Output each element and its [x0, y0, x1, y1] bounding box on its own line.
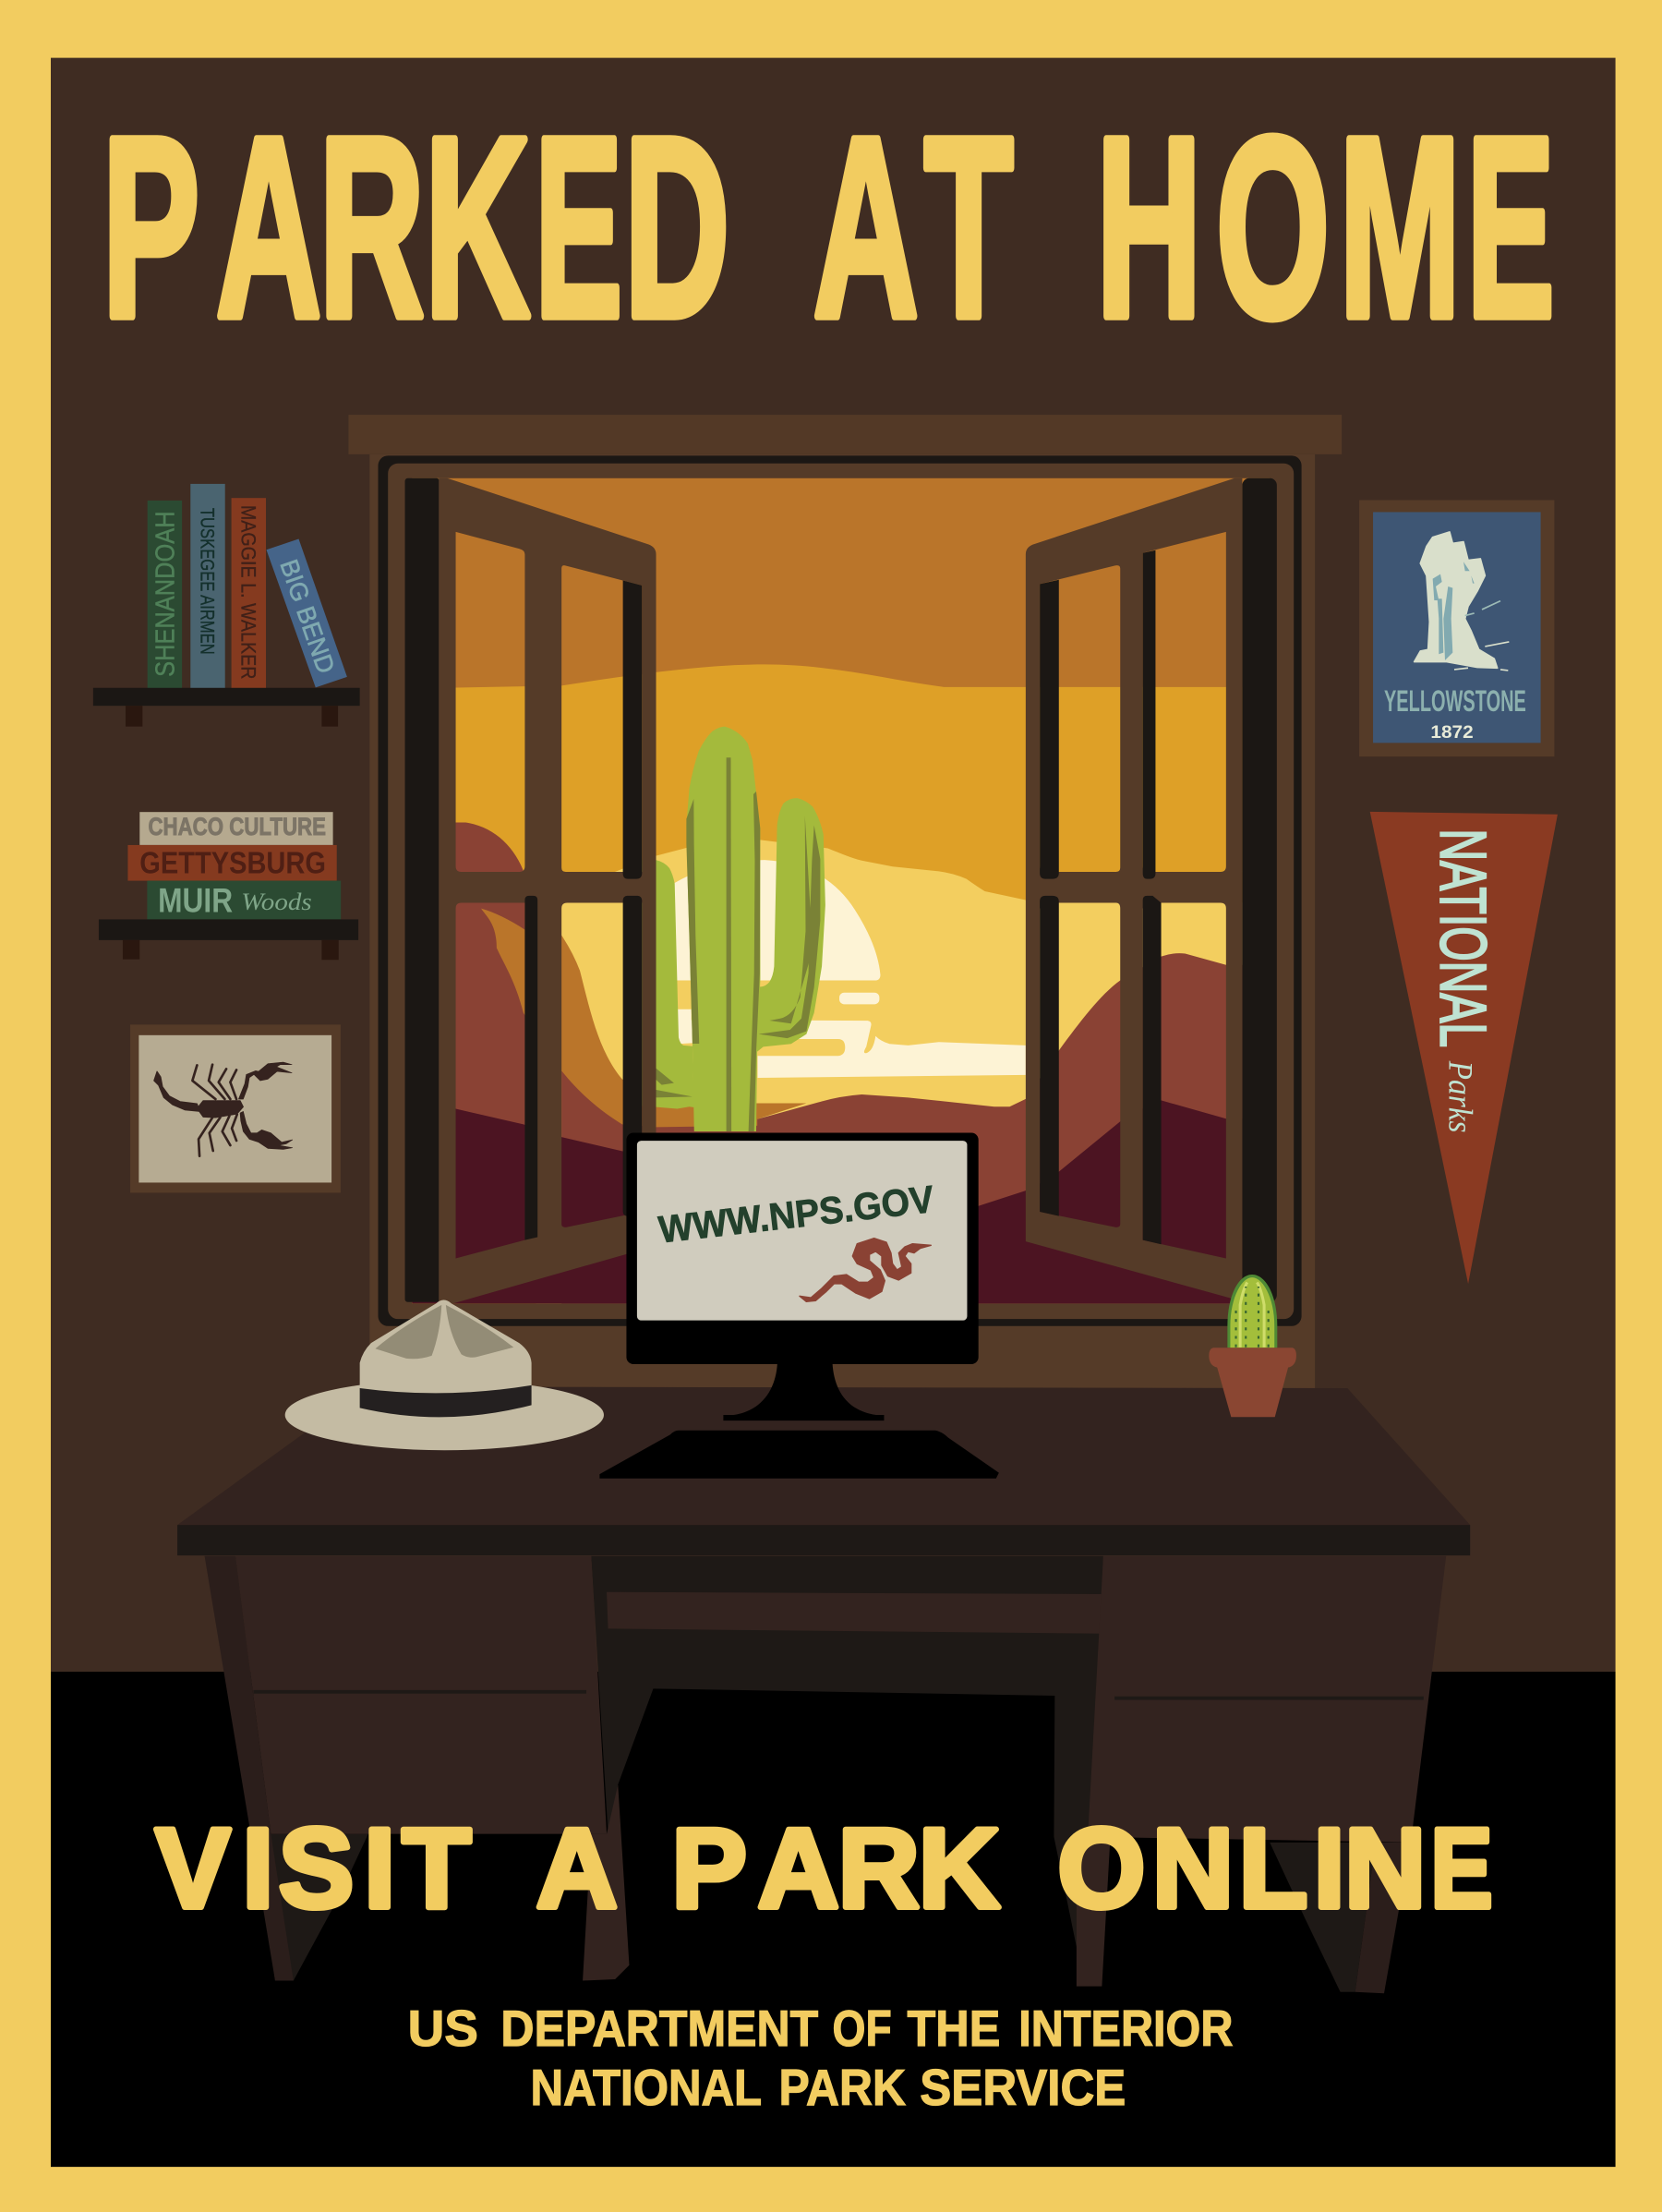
desk center recess: [591, 1556, 1103, 1947]
book: Shenandoah: SHENANDOAH: [151, 511, 180, 677]
setting sun and reflections: [656, 860, 1026, 1078]
agency name: [408, 2000, 1233, 2116]
National Parks pennant: [1370, 812, 1558, 1284]
brackets: [123, 940, 339, 960]
left pedestal inner leg: [583, 1784, 629, 1981]
window scene: desert sunset: [412, 478, 1270, 1303]
cactus shading: [656, 757, 820, 1131]
agency name: PARK: [778, 2059, 906, 2116]
title: E: [1467, 83, 1555, 370]
book: Big Bend: [266, 538, 347, 687]
sky: [412, 478, 1270, 1303]
headline: visit a park online: VISIT: [155, 1805, 471, 1931]
right pedestal drawers: [1088, 1556, 1446, 1843]
window casing: [348, 415, 1342, 1391]
book: Maggie L. Walker: MAGGIE L. WALKER: [237, 505, 260, 679]
book: Muir Woods: [147, 881, 341, 919]
agency name: DEPARTMENT: [500, 2000, 818, 2057]
center drawer: [607, 1592, 1102, 1634]
red mountain left: [412, 822, 561, 1171]
book: Tuskegee Airmen: [190, 484, 225, 688]
desk front lip: [177, 1525, 1470, 1555]
right window jamb: [1242, 478, 1277, 1302]
book: Muir Woods: Woods: [241, 888, 312, 915]
floor: [51, 1672, 1616, 2167]
monitor: [626, 1133, 979, 1420]
small cactus body: [1227, 1275, 1277, 1348]
potted cactus: [1209, 1275, 1296, 1417]
headline: visit a park online: E: [1430, 1805, 1493, 1931]
icon: geyser: [1415, 532, 1509, 671]
terracotta pot: [1209, 1348, 1296, 1417]
book: Big Bend: BIG BEND: [274, 556, 341, 677]
agency name: SERVICE: [920, 2059, 1126, 2116]
framed scorpion: [130, 1024, 341, 1192]
rear left leg: [254, 1834, 368, 1981]
framed Yellowstone poster: [1359, 500, 1554, 756]
left arm: [635, 860, 694, 1109]
title: E: [535, 83, 622, 370]
monitor screen: [637, 1141, 967, 1321]
book: Chaco Culture: CHACO CULTURE: [148, 813, 326, 840]
framed Yellowstone poster: YELLOWSTONE: [1384, 683, 1526, 718]
icon: scorpion: [154, 1062, 293, 1156]
room wall: [51, 58, 1616, 1672]
icon: snake: [800, 1239, 931, 1301]
shelf board: [93, 688, 360, 706]
brackets: [126, 706, 338, 727]
keyboard: [599, 1431, 999, 1479]
right arm: [756, 798, 825, 1052]
saguaro cactus: [635, 727, 825, 1131]
bookshelf lower: [99, 812, 358, 960]
title: HOM: [1096, 83, 1461, 370]
website URL: WWW.NPS.GOV: [656, 1178, 936, 1251]
book: Maggie L. Walker: [232, 498, 266, 688]
orange ridge: [481, 909, 806, 1142]
hat band: [360, 1385, 532, 1417]
title: D: [624, 83, 729, 370]
book: Muir Woods: MUIR: [158, 881, 233, 919]
National Parks pennant: NATIONAL: [1427, 828, 1500, 1047]
desk: [177, 1386, 1470, 1993]
right outer leg: [1355, 1843, 1411, 1993]
framed Yellowstone poster: 1872: [1430, 723, 1474, 743]
agency name: INTERIOR: [1018, 2000, 1233, 2057]
trunk: [686, 727, 760, 1131]
agency name: NATIONAL: [531, 2059, 762, 2116]
agency name: THE: [908, 2000, 1000, 2057]
headline: visit a park online: A: [536, 1805, 618, 1931]
title: PARK: [102, 83, 530, 370]
National Parks pennant: Parks: [1441, 1060, 1479, 1133]
maroon foreground: [412, 1100, 1270, 1303]
right shutter: [1026, 478, 1242, 1303]
pale yellow dunes: [536, 840, 1270, 1303]
bookshelf upper: [93, 484, 360, 727]
agency name: OF: [833, 2000, 892, 2057]
ochre dunes: [412, 664, 1270, 1303]
ranger hat: [285, 1300, 604, 1450]
agency name: US: [408, 2000, 478, 2057]
left pedestal drawers: [235, 1556, 607, 1834]
left outer leg: [205, 1556, 294, 1981]
book: Gettysburg: GETTYSBURG: [139, 846, 326, 880]
shelf board: [99, 919, 358, 940]
title: AT: [813, 83, 1014, 370]
desk surface: [177, 1386, 1470, 1525]
headline: visit a park online: PARK: [671, 1805, 1000, 1931]
red foreground hills: [561, 953, 1270, 1303]
right inner leg: [1077, 1834, 1111, 1987]
book: Tuskegee Airmen: TUSKEGEE AIRMEN: [196, 508, 217, 655]
drawer seams: [253, 1690, 1424, 1700]
left shutter: [439, 478, 656, 1303]
headline: visit a park online: ONLIN: [1057, 1805, 1426, 1931]
left window jamb: [405, 478, 440, 1302]
rear right leg: [1270, 1843, 1376, 1992]
